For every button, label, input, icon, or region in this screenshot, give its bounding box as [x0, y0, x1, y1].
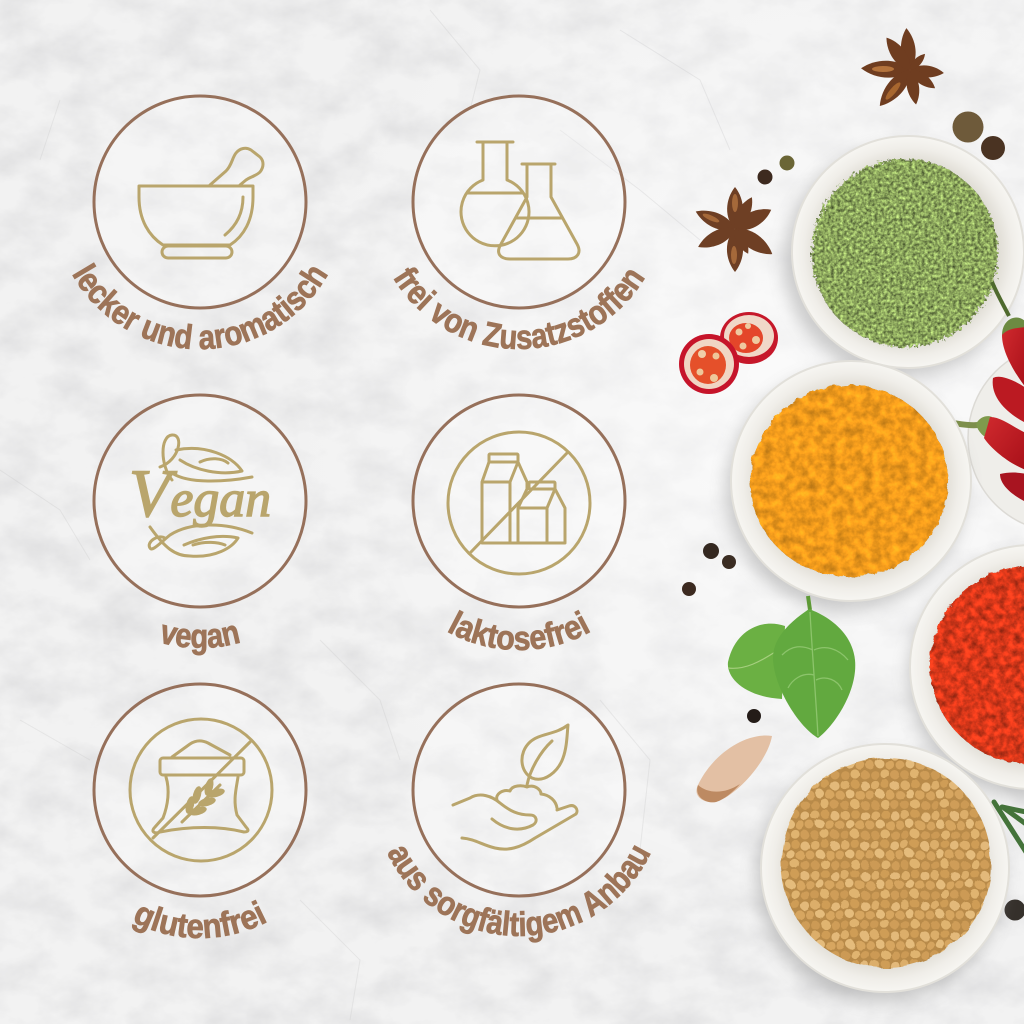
panel: frei von Zusatzstoffen	[394, 94, 645, 350]
icon: laboratory flasks	[461, 142, 579, 259]
badge ring	[94, 96, 306, 308]
label: frei von Zusatzstoffen	[394, 267, 645, 350]
badge ring	[413, 395, 625, 607]
label: lecker und aromatisch	[72, 262, 328, 350]
photo: spices composition	[679, 28, 1024, 1002]
panel: lecker und aromatisch	[72, 94, 328, 350]
icon: chili slices	[679, 312, 778, 394]
panel: vegan	[92, 394, 308, 656]
panel: turmeric bowl	[731, 361, 971, 601]
panel: mustard seed bowl	[761, 744, 1009, 992]
icon: small bowl with chilis	[967, 360, 1024, 525]
panel: glutenfrei	[92, 682, 308, 939]
label: aus sorgfältigem Anbau	[388, 845, 651, 943]
badge ring	[413, 684, 625, 896]
panel: chilis	[953, 282, 1024, 502]
panel: paprika bowl	[910, 545, 1024, 789]
badge ring	[94, 395, 306, 607]
icon: basil leaves	[728, 596, 855, 738]
label: vegan	[162, 624, 240, 656]
icon: rosemary sprig	[994, 802, 1024, 852]
label: laktosefrei	[448, 610, 590, 651]
icon: vegan lettering with leaves: Vegan	[129, 455, 271, 531]
icon: seedling in hand	[453, 725, 577, 849]
icon: vegan lettering with leaves	[129, 435, 271, 556]
icon: mortar and pestle	[139, 148, 263, 258]
panel: aus sorgfaeltigem Anbau	[388, 682, 651, 943]
label: glutenfrei	[132, 900, 267, 939]
icon: crossed-out flour sack	[130, 719, 272, 861]
icon: wheat grains	[184, 777, 226, 817]
icon: crossed-out milk cartons	[448, 432, 590, 574]
panel: laktosefrei	[412, 394, 626, 651]
bowl shadows	[726, 146, 1024, 1002]
badge ring	[413, 96, 625, 308]
badge ring	[94, 684, 306, 896]
icon: garlic clove	[696, 736, 772, 802]
icon: star anise middle	[693, 187, 777, 272]
icon: peppercorns	[682, 112, 1024, 920]
panel: oregano bowl	[792, 136, 1024, 368]
icon: star anise top	[861, 28, 944, 111]
